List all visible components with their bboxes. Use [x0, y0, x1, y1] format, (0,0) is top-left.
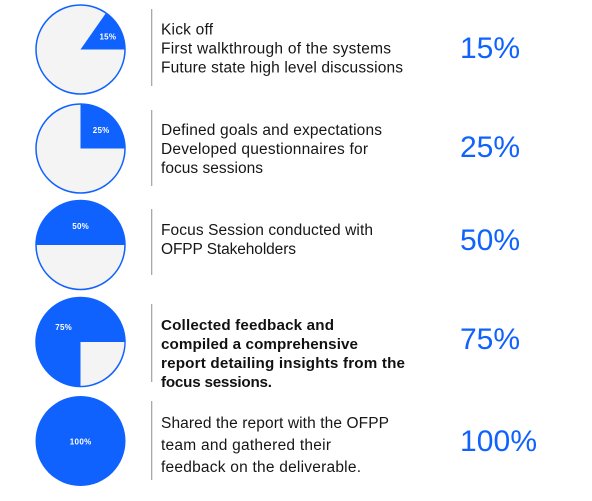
text: collected feedback: report detailing insights from the: [161, 355, 405, 372]
icon: pie 75 percent: [36, 298, 125, 386]
text: shared report: feedback on the deliverable.: [161, 459, 361, 476]
row: 100 percent: [36, 396, 537, 486]
icon: pie 75 percent: 75%: [55, 323, 72, 332]
text: collected feedback: Collected feedback and: [161, 317, 334, 334]
row: 15 percent: [36, 5, 520, 94]
text: goals: Defined goals and expectations: [161, 122, 382, 139]
icon: pie 15 percent: 15%: [99, 32, 116, 42]
text: shared report: Shared the report with the OFPP: [161, 415, 389, 432]
text: focus session: [161, 222, 373, 258]
text: goals: focus sessions: [161, 160, 263, 177]
divider: [151, 304, 152, 382]
value: 50%: 50%: [460, 224, 520, 257]
icon: pie 50 percent: [36, 200, 125, 290]
text: kick off: Kick off: [161, 22, 214, 38]
text: collected feedback: [161, 317, 405, 391]
icon: pie 100 percent: 100%: [70, 437, 91, 446]
value: 100%: 100%: [460, 425, 537, 458]
icon: pie 25 percent: [36, 104, 125, 193]
text: collected feedback: focus sessions.: [161, 374, 272, 391]
row: 50 percent: [36, 200, 520, 290]
icon: pie 15 percent: [36, 5, 125, 94]
text: kick off: First walkthrough of the systems: [161, 40, 391, 57]
divider: [151, 401, 152, 480]
row: 75 percent: [36, 298, 520, 391]
text: kick off: [161, 22, 403, 76]
text: focus session: OFPP Stakeholders: [161, 241, 296, 258]
divider: [151, 110, 152, 186]
text: focus session: Focus Session conducted with: [161, 222, 373, 239]
text: shared report: [161, 415, 389, 476]
text: goals: [161, 122, 382, 177]
row: 25 percent: [36, 104, 520, 193]
value: 15%: 15%: [460, 32, 520, 65]
divider: [151, 209, 152, 275]
icon: pie 100 percent: [36, 396, 126, 486]
text: collected feedback: compiled a comprehensive: [161, 336, 358, 353]
value: 25%: 25%: [460, 131, 520, 164]
text: goals: Developed questionnaires for: [161, 141, 368, 158]
value: 75%: 75%: [460, 323, 520, 356]
text: kick off: Future state high level discussions: [161, 59, 403, 76]
text: shared report: team and gathered their: [161, 437, 331, 454]
icon: pie 25 percent: 25%: [93, 126, 109, 135]
icon: pie 50 percent: 50%: [72, 222, 89, 231]
divider: [151, 9, 152, 86]
